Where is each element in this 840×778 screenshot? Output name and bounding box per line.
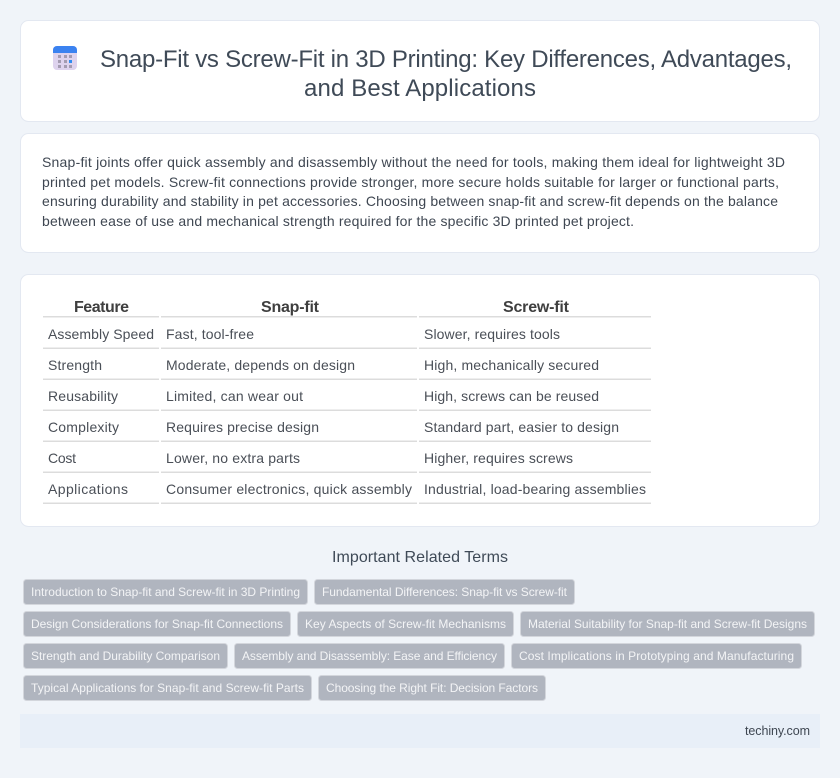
header card [20,20,820,122]
chip [512,644,802,668]
chip: Key Aspects of Screw-fit Mechanisms [305,617,506,631]
chip: Typical Applications for Snap-fit and Screw-fit Parts [31,681,304,695]
row: strength: Strength [48,357,102,373]
summary text: Snap-fit joints offer quick assembly and disassembly without the need for tools, making them ideal for lightweight 3D [42,154,785,170]
chip [24,580,308,604]
title: and Best Applications [304,75,536,102]
row: assembly speed: Slower, requires tools [424,326,560,342]
summary text [42,154,785,229]
chip: Fundamental Differences: Snap-fit vs Screw-fit [322,585,568,599]
related terms heading: Important Related Terms [332,549,508,566]
row: cost: Lower, no extra parts [166,450,300,466]
chip: Material Suitability for Snap-fit and Screw-fit Designs [528,617,807,631]
table header: Feature [74,299,129,316]
title: Snap-Fit vs Screw-Fit in 3D Printing: Key Differences, Advantages, [100,46,792,73]
summary panel [20,134,820,252]
row: reusability [48,388,599,404]
row: assembly speed [48,326,560,342]
table header: Snap-fit [261,299,320,316]
chip: Cost Implications in Prototyping and Manufacturing [519,649,794,663]
chip [24,612,290,636]
chip [318,676,546,700]
row: applications: Consumer electronics, quick assembly [166,481,412,497]
footer site name: techiny.com [745,724,810,738]
related terms chips [24,580,814,700]
chip [520,612,814,636]
chip: Choosing the Right Fit: Decision Factors [326,681,538,695]
row: reusability: Limited, can wear out [166,388,303,404]
summary text: between ease of use and mechanical strength required for the specific 3D printed pet project. [42,213,634,229]
table header [74,299,570,316]
chip [24,644,228,668]
row: applications [48,481,646,497]
row: complexity [48,419,619,435]
row: assembly speed: Assembly Speed [48,326,154,342]
chip: Design Considerations for Snap-fit Connections [31,617,283,631]
row: complexity: Complexity [48,419,119,435]
chip [24,676,312,700]
row: applications: Applications [48,481,128,497]
summary text: printed pet models. Screw-fit connections provide stronger, more secure holds suitable for larger or functional parts, [42,174,779,190]
row: cost: Higher, requires screws [424,450,573,466]
summary text: ensuring durability and stability in pet accessories. Choosing between snap-fit and screw-fit depends on the balance [42,193,778,209]
title [100,46,792,102]
icon: calendar [53,46,77,70]
row: applications: Industrial, load-bearing assemblies [424,481,646,497]
row: cost [48,450,573,466]
row: complexity: Standard part, easier to design [424,419,619,435]
chip [314,580,574,604]
chip [298,612,514,636]
table header: Screw-fit [503,299,570,316]
row: assembly speed: Fast, tool-free [166,326,254,342]
row: strength [48,357,599,373]
row: reusability: Reusability [48,388,118,404]
row: strength: High, mechanically secured [424,357,599,373]
chip: Strength and Durability Comparison [31,649,220,663]
row: cost: Cost [48,450,76,466]
comparison table panel [20,274,820,526]
chip: Assembly and Disassembly: Ease and Efficiency [242,649,497,663]
chip [234,644,504,668]
chip: Introduction to Snap-fit and Screw-fit in 3D Printing [31,585,300,599]
row: reusability: High, screws can be reused [424,388,599,404]
row: complexity: Requires precise design [166,419,319,435]
footer bar [20,714,820,748]
row: strength: Moderate, depends on design [166,357,355,373]
